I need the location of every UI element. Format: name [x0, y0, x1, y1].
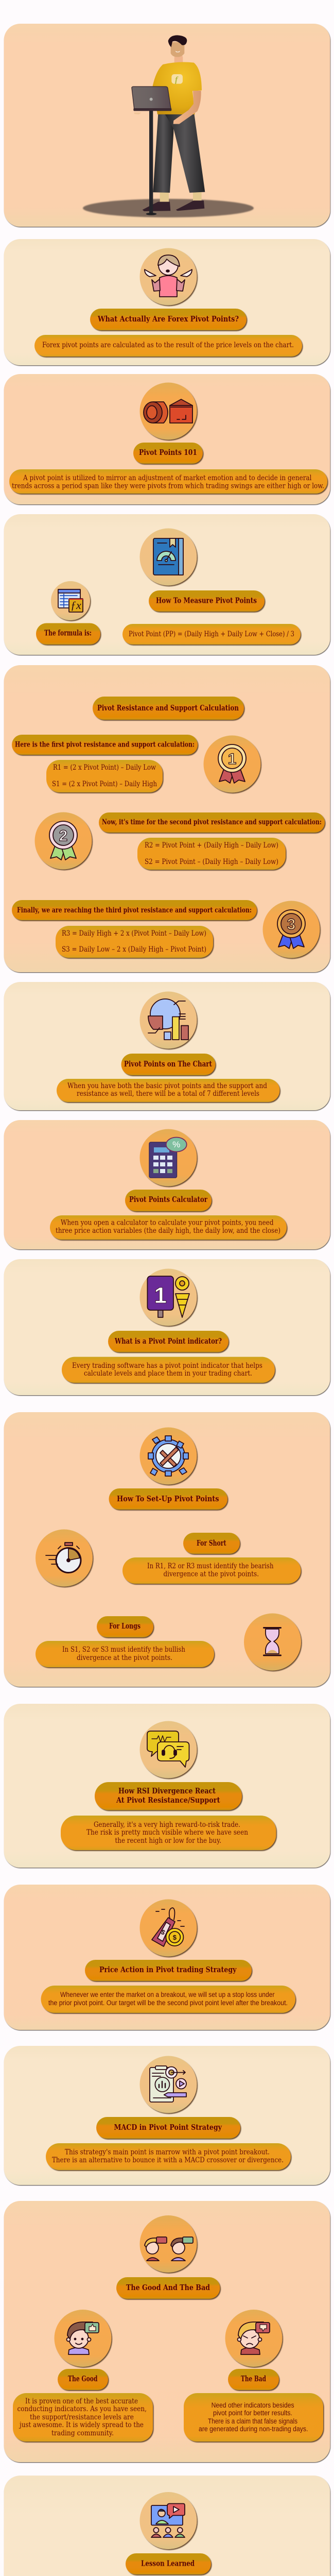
- heading: How To Measure Pivot Points: [156, 596, 257, 605]
- label: the good: The Good: [68, 2374, 98, 2383]
- heading: Pivot Points 101: [139, 448, 197, 457]
- icon: chat bubbles: [140, 1721, 197, 1778]
- panel: pivot point indicator: [4, 1259, 330, 1395]
- heading: [90, 309, 247, 330]
- panel: lesson learned: [4, 2476, 330, 2576]
- heading: Price Action in Pivot trading Strategy: [99, 1965, 237, 1974]
- panel: the good and the bad: [4, 2201, 330, 2462]
- icon: strategy document: [140, 2056, 197, 2113]
- first calculation heading: [12, 735, 198, 755]
- icon: formula window: ƒx: [71, 599, 81, 612]
- text block: the recent high or low for the buy.: [115, 1837, 221, 1845]
- icon: medal 2: [35, 812, 92, 870]
- panel: resistance and support: [4, 665, 330, 972]
- heading: [109, 1488, 227, 1510]
- text block: for short: [122, 1557, 301, 1584]
- heading: [96, 2117, 240, 2139]
- heading: [133, 443, 203, 464]
- text block: the good: just awesome. It is widely spread to the: [19, 2421, 144, 2429]
- heading: [121, 1054, 215, 1075]
- text block: the prior pivot point. Our target will be the second pivot point level after the breakout.: [48, 1999, 288, 2007]
- panel: hero: [4, 24, 330, 227]
- heading: What Actually Are Forex Pivot Points?: [97, 314, 239, 324]
- panel: RSI divergence: [4, 1704, 330, 1868]
- second calculation formulas: S2 = Pivot Point – (Daily High – Daily Low): [145, 858, 278, 866]
- icon: pie and bar chart: [140, 991, 197, 1049]
- heading: What is a Pivot Point indicator?: [114, 1336, 222, 1346]
- text block: Whenever we enter the market on a breakout, we will set up a stop loss under: [60, 1991, 275, 1998]
- formula: Pivot Point (PP) = (Daily High + Daily Low + Close) / 3: [129, 630, 294, 638]
- label: for short: For Short: [197, 1538, 226, 1548]
- text block: three price action variables (the daily high, the daily low, and the close): [56, 1227, 280, 1235]
- icon: medal 2: 2: [59, 827, 67, 844]
- text block: When you open a calculator to calculate your pivot points, you need: [61, 1219, 274, 1227]
- icon: calculator with percent bubble: [140, 1129, 197, 1186]
- icon: book with gauge: [140, 529, 197, 585]
- icon: two faces: [140, 2215, 197, 2273]
- heading: [126, 2553, 211, 2574]
- heading: [95, 1782, 242, 1810]
- heading: [125, 1190, 212, 1211]
- third calculation heading: [12, 900, 257, 920]
- label: for short: [183, 1533, 240, 1554]
- icon: formula window: [51, 581, 90, 620]
- icon: medal 1: [204, 736, 260, 792]
- text block: for short: In R1, R2 or R3 must identify the bearish: [147, 1562, 274, 1570]
- icon: stopwatch: [36, 1529, 93, 1587]
- label: for longs: For Longs: [109, 1621, 140, 1631]
- label: the bad: [228, 2369, 279, 2390]
- icon: price tag and coin: $: [160, 1928, 167, 1937]
- icon: hourglass: [244, 1614, 301, 1670]
- text block: resistance as well, there will be a total of 7 different levels: [77, 1090, 259, 1098]
- heading: Lesson Learned: [141, 2558, 195, 2568]
- text block: the good: It is proven one of the best accurate: [25, 2397, 138, 2405]
- heading: How To Set-Up Pivot Points: [117, 1494, 219, 1503]
- panel: price action: [4, 1885, 330, 2030]
- icon: number sign and pin: [140, 1268, 197, 1326]
- heading: [116, 2277, 220, 2299]
- heading: [108, 1331, 228, 1352]
- heading: At Pivot Resistance/Support: [116, 1795, 220, 1805]
- text block: Forex pivot points are calculated as to the result of the price levels on the chart.: [42, 341, 294, 349]
- figure: man with laptop on a stand: [132, 35, 205, 215]
- panel: how to measure: [4, 514, 330, 655]
- text block: There is an alternative to bounce it with a MACD crossover or divergence.: [52, 2156, 284, 2164]
- panel: pivot points on the chart: [4, 982, 330, 1110]
- text block: for longs: [36, 1641, 214, 1667]
- text block: Generally, it's a very high reward-to-risk trade.: [94, 1821, 240, 1829]
- text block: the bad: [184, 2393, 323, 2442]
- second calculation heading: [99, 812, 325, 833]
- text block: the bad: Need other indicators besides: [212, 2401, 294, 2409]
- text block: the bad: There is a claim that false signals: [208, 2417, 297, 2425]
- icon: price tag and coin: [140, 1899, 197, 1957]
- icon: angry face: [225, 2310, 282, 2367]
- first calculation formulas: [46, 760, 163, 792]
- heading: The Good And The Bad: [126, 2283, 210, 2292]
- text block: [61, 1816, 276, 1850]
- icon: shrugging person: [140, 248, 197, 305]
- panel: calculator: [4, 1120, 330, 1249]
- text block: the bad: pivot point for better results.: [213, 2409, 292, 2417]
- heading: Pivot Resistance and Support Calculation: [97, 703, 239, 713]
- icon: happy face: [55, 2310, 111, 2367]
- text block: [41, 1986, 295, 2013]
- icon: price tag and coin: $: [173, 1934, 177, 1941]
- text block: Every trading software has a pivot point indicator that helps: [72, 1362, 262, 1370]
- text block: for longs: In S1, S2 or S3 must identify the bullish: [62, 1646, 185, 1654]
- text block: The risk is pretty much visible where we have seen: [86, 1828, 248, 1837]
- text block: When you have both the basic pivot points and the support and: [67, 1082, 267, 1090]
- icon: cylinder and envelope: [140, 382, 197, 440]
- second calculation formulas: R2 = Pivot Point + (Daily High – Daily Low): [145, 841, 278, 850]
- text block: for short: divergence at the pivot points.: [164, 1570, 259, 1579]
- text block: This strategy's main point is marrow with a pivot point breakout.: [65, 2148, 270, 2157]
- text block: [57, 1079, 280, 1102]
- third calculation formulas: S3 = Daily Low – 2 x (Daily High – Pivot Point): [62, 945, 206, 954]
- text block: the good: [13, 2393, 153, 2442]
- formula label: [36, 623, 100, 645]
- panel: how to set up: [4, 1412, 330, 1687]
- heading: [93, 697, 244, 720]
- third calculation formulas: R3 = Daily High + 2 x (Pivot Point – Daily Low): [62, 929, 206, 938]
- text block: the good: the support/resistance levels are: [30, 2413, 134, 2421]
- heading: Pivot Points Calculator: [129, 1195, 208, 1204]
- label: for longs: [97, 1616, 153, 1637]
- first calculation formulas: S1 = (2 x Pivot Point) – Daily High: [52, 780, 157, 788]
- first calculation heading: Here is the first pivot resistance and support calculation:: [15, 741, 195, 749]
- heading: Pivot Points on The Chart: [124, 1059, 212, 1069]
- formula: [122, 624, 301, 645]
- panel: pivot points 101: [4, 374, 330, 504]
- second calculation formulas: [137, 838, 286, 870]
- first calculation formulas: R1 = (2 x Pivot Point) – Daily Low: [53, 764, 156, 772]
- text block: [62, 1357, 275, 1383]
- heading: [149, 590, 265, 612]
- label: the bad: The Bad: [241, 2374, 266, 2383]
- panel: MACD: [4, 2046, 330, 2185]
- panel: what are pivot points: [4, 239, 330, 365]
- text block: [34, 335, 302, 357]
- icon: medal 1: 1: [228, 751, 236, 768]
- label: the good: [58, 2369, 108, 2390]
- icon: medal 3: 3: [287, 916, 295, 933]
- icon: number sign and pin: 1: [154, 1283, 167, 1308]
- ground shadow: [83, 199, 254, 217]
- icon: calculator with percent bubble: %: [172, 1140, 180, 1149]
- text block: the good: conducting indicators. As you have seen,: [17, 2405, 147, 2413]
- third calculation heading: Finally, we are reaching the third pivot resistance and support calculation:: [17, 906, 252, 914]
- text block: for longs: divergence at the pivot points.: [77, 1654, 172, 1662]
- text block: calculate levels and place them in your trading chart.: [84, 1369, 252, 1378]
- heading: MACD in Pivot Point Strategy: [114, 2123, 222, 2132]
- text block: [46, 2143, 291, 2170]
- text block: [50, 1215, 287, 1240]
- formula label: The formula is:: [44, 629, 92, 638]
- heading: [85, 1960, 252, 1981]
- icon: gear with tools: [140, 1427, 197, 1485]
- third calculation formulas: [56, 926, 213, 958]
- icon: video lesson: [140, 2492, 197, 2549]
- figure: man with laptop on a stand: f: [175, 75, 179, 84]
- heading: How RSI Divergence React: [118, 1786, 216, 1795]
- text block: [9, 469, 327, 494]
- icon: medal 3: [262, 901, 320, 958]
- text block: the good: trading community.: [51, 2429, 114, 2437]
- text block: the bad: are generated during non-trading days.: [199, 2425, 308, 2433]
